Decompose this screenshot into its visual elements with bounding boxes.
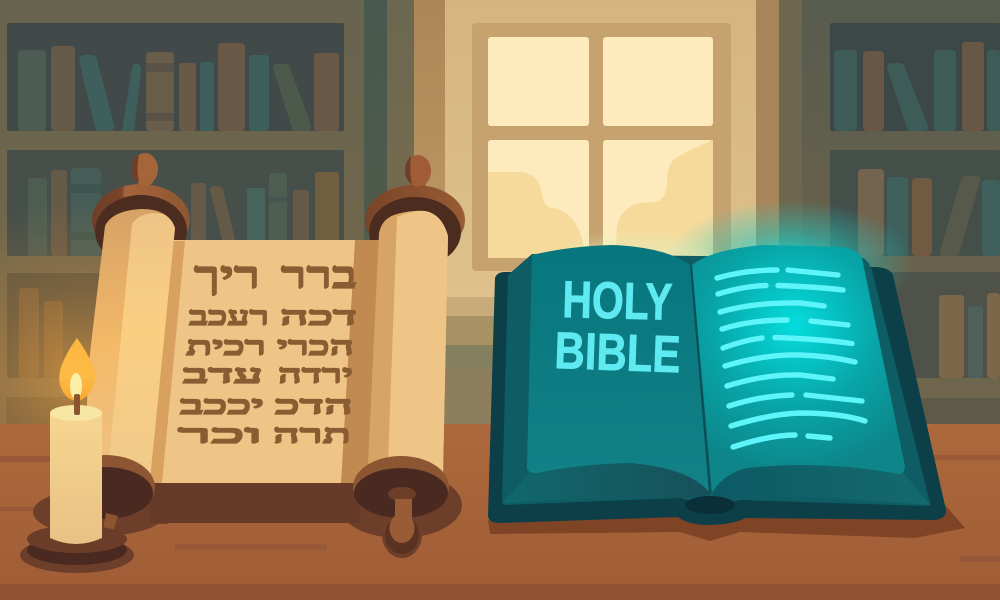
books: top right shelf	[834, 42, 1000, 131]
hebrew text: רכית	[186, 332, 266, 361]
books: middle left shelf	[28, 168, 339, 256]
candle top	[50, 405, 102, 421]
books: top left shelf	[18, 43, 339, 131]
wick	[74, 394, 80, 415]
candle base	[20, 525, 134, 573]
book shadow	[488, 505, 965, 541]
title: holy bible: HOLY	[562, 271, 673, 332]
lower left cap	[55, 455, 155, 535]
cloud right	[615, 140, 713, 258]
hebrew text: דכה	[280, 302, 357, 331]
hebrew text: ריך	[194, 255, 260, 297]
cloud left	[488, 172, 586, 258]
outer cover	[488, 267, 946, 525]
upper right cap	[365, 185, 465, 267]
books: lower left shelf	[19, 288, 63, 378]
lower right knob	[385, 499, 419, 554]
lower band left	[503, 460, 710, 503]
books: middle right shelf	[858, 169, 1000, 256]
hebrew text: עדב	[183, 360, 263, 389]
dark band below sheet	[150, 483, 360, 523]
hebrew text: ירדה	[278, 360, 353, 389]
candle	[20, 338, 134, 573]
window	[472, 23, 731, 271]
flame	[59, 338, 95, 401]
upper left knob	[131, 153, 158, 186]
torah scroll	[33, 153, 465, 558]
left bookcase	[0, 0, 414, 424]
hebrew text: רעכב	[189, 302, 269, 331]
glow: book light above the open book	[570, 200, 915, 324]
right page	[692, 245, 905, 493]
flame core	[70, 373, 82, 399]
glowing text lines	[717, 270, 865, 447]
title: holy bible	[554, 271, 682, 384]
candle body	[50, 413, 102, 544]
upper right knob	[405, 155, 431, 187]
glow: candle light on wall	[0, 200, 285, 550]
hebrew text: תרה	[273, 420, 351, 449]
open bible	[488, 245, 965, 541]
hebrew text: הכרי	[277, 332, 354, 361]
lower band right	[712, 460, 930, 505]
hebrew text: וכר	[178, 420, 262, 449]
scroll shadows	[33, 472, 462, 558]
left page	[527, 245, 710, 493]
hebrew text: הדכ	[275, 391, 353, 420]
lower right cap	[353, 456, 449, 518]
books: lower right shelf	[939, 293, 1000, 378]
right bookcase	[802, 0, 1000, 424]
spine line	[691, 265, 710, 493]
left roll	[85, 209, 175, 480]
parchment sheet	[150, 240, 380, 483]
window sill and lower wall	[414, 297, 505, 424]
hebrew text	[178, 255, 357, 449]
wall and trim	[414, 0, 445, 424]
hebrew text: יככב	[180, 391, 264, 420]
title: holy bible: BIBLE	[554, 322, 682, 384]
upper left cap	[92, 184, 190, 267]
hebrew text: ברר	[281, 255, 357, 297]
right trim	[756, 0, 779, 424]
table	[0, 424, 1000, 600]
right roll	[368, 211, 448, 475]
spine end	[685, 496, 735, 514]
inner cover block	[502, 254, 930, 507]
